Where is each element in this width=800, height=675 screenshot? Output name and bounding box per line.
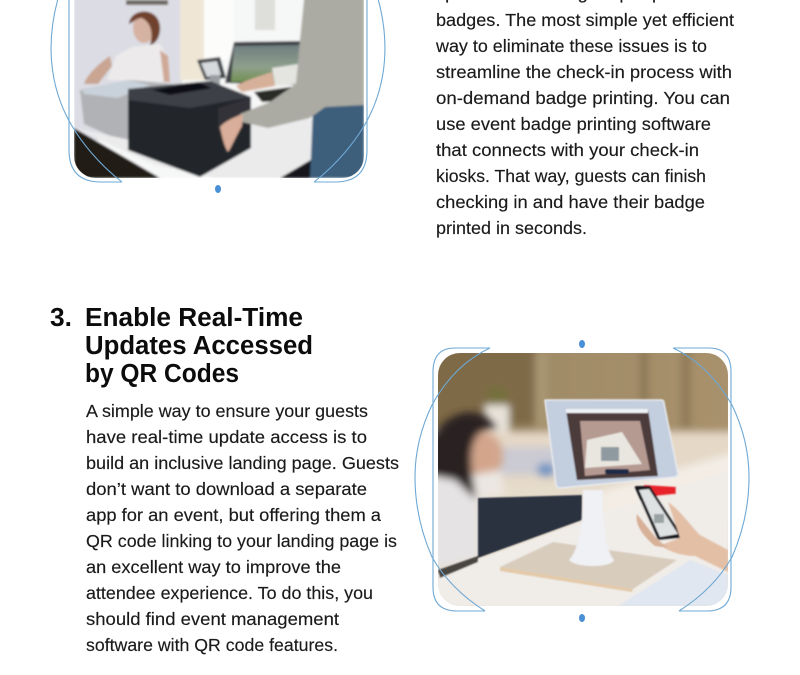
frame dot above photo two bbox=[579, 340, 585, 348]
frame dot below photo two bbox=[579, 614, 585, 622]
text block: point 3 body: attendee experience. To do this, you bbox=[86, 583, 373, 603]
text block: point 2 continuation bbox=[435, 0, 734, 238]
text block: point 3 body: build an inclusive landing page. Guests bbox=[86, 453, 399, 473]
text block: point 2 continuation: streamline the check-in process with bbox=[436, 62, 732, 82]
text block: point 3 body: don’t want to download a separate bbox=[86, 479, 367, 499]
text block: point 3 body: QR code linking to your landing page is bbox=[86, 531, 397, 551]
photo: QR code check-in kiosk bbox=[430, 345, 735, 610]
photo: two people at a badge printer bbox=[74, 0, 364, 178]
text block: point 3 body: app for an event, but offering them a bbox=[86, 505, 381, 525]
text block: point 3 body: A simple way to ensure your guests bbox=[86, 401, 368, 421]
text block: point 2 continuation: way to eliminate these issues is to bbox=[435, 36, 707, 56]
text block: point 3 body: software with QR code features. bbox=[86, 635, 338, 655]
text block: point 3 body: have real-time update access is to bbox=[86, 427, 367, 447]
text block: point 2 continuation: badges. The most simple yet efficient bbox=[436, 10, 734, 30]
decorative frame around photo one bbox=[51, 0, 385, 182]
text block: point 3 body bbox=[86, 401, 399, 655]
text block: point 3 body: should find event management bbox=[86, 609, 339, 629]
heading: point 3: Enable Real-Time bbox=[85, 304, 303, 332]
text block: point 3 body: an excellent way to improve the bbox=[86, 557, 341, 577]
decorative frame around photo two bbox=[415, 348, 749, 611]
frame dot under photo one bbox=[215, 185, 221, 193]
text block: point 2 continuation: use event badge printing software bbox=[436, 114, 711, 134]
text block: point 2 continuation: checking in and have their badge bbox=[436, 192, 705, 212]
heading: point 3: Updates Accessed bbox=[85, 332, 313, 360]
text block: point 2 continuation: on-demand badge printing. You can bbox=[436, 88, 730, 108]
text block: point 2 continuation: kiosks. That way, guests can finish bbox=[436, 166, 706, 186]
heading: point 3 bbox=[50, 304, 313, 388]
heading: point 3: 3. bbox=[50, 304, 72, 332]
heading: point 3: by QR Codes bbox=[85, 360, 239, 388]
text block: point 2 continuation: that connects with your check-in bbox=[436, 140, 699, 160]
text block: point 2 continuation: printed in seconds. bbox=[436, 218, 587, 238]
